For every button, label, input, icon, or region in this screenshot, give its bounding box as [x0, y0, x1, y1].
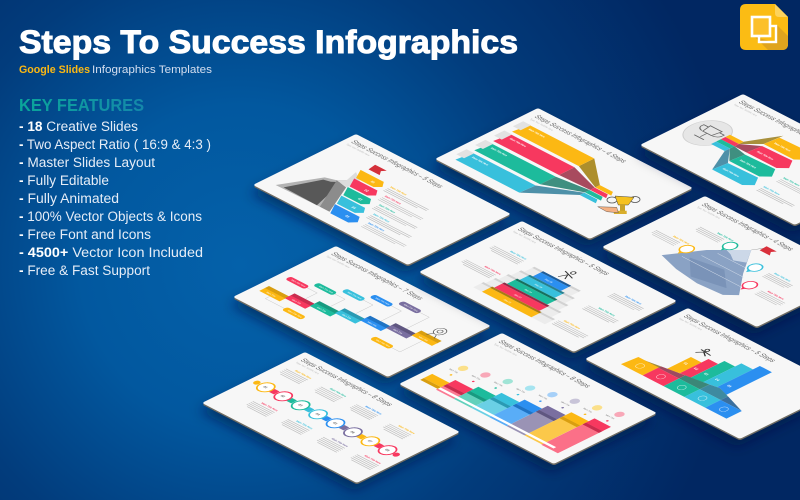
step texts: Main Title Here	[330, 438, 350, 448]
flag	[751, 244, 777, 257]
icons and labels: Main Title	[448, 368, 459, 374]
slide subtitle: Type Your Subtitle Here	[345, 143, 372, 157]
ring timeline: 06	[349, 430, 356, 434]
step texts	[337, 186, 458, 248]
feature list: - Two Aspect Ratio ( 16:9 & 4:3 )	[19, 137, 211, 152]
ring timeline	[248, 378, 406, 459]
slide: ascending blocks 8 steps	[396, 333, 657, 472]
step texts: Main Title Here	[773, 272, 793, 282]
slide title: Steps Success Infographics – 4 Steps	[532, 114, 629, 164]
icons and labels	[443, 346, 627, 440]
arrow tags	[302, 170, 411, 225]
step blocks: Main Title	[392, 329, 404, 335]
title pills: Main Title Here	[402, 304, 419, 313]
slide title: Steps Success Infographics – 5 Steps	[349, 139, 446, 189]
feature list: - Free & Fast Support	[19, 263, 150, 278]
funnel tags: Main Title Here	[738, 159, 758, 169]
step texts: Main Title Here	[363, 455, 383, 465]
slide title: Steps Success Infographics – 5 Steps	[515, 227, 612, 276]
stepped columns: 02	[692, 367, 699, 371]
step texts: Main Title Here	[295, 420, 315, 430]
slide: stairs 5 steps	[416, 221, 677, 360]
slide subtitle: Type Your Subtitle Here	[325, 255, 352, 269]
funnel bars: Main Title Here	[489, 147, 509, 157]
arrow tags: 02	[363, 189, 370, 193]
title pills: Main Title Here	[346, 291, 363, 300]
arrow tags: 05	[344, 215, 351, 218]
step texts: Main Title Here	[367, 222, 387, 232]
coloured stair bands	[482, 266, 583, 317]
title pills: Main Title Here	[290, 279, 307, 288]
icons and labels: Main Title	[604, 414, 616, 420]
slide title: Steps Success Infographics – 5 Steps	[681, 314, 778, 363]
slide: ring timeline 8 steps	[199, 352, 460, 491]
icon: runner	[556, 269, 580, 281]
slide: zig-zag blocks 7 steps	[230, 246, 491, 385]
step texts: Main Title Here	[597, 307, 617, 317]
feature list: - Master Slides Layout	[19, 155, 155, 170]
slide subtitle: Type Your Subtitle Here	[732, 103, 759, 117]
step texts: Main Title Here	[782, 177, 800, 187]
icon: trophy and hand	[598, 196, 640, 214]
coloured stair bands: Step 02	[513, 294, 523, 299]
icon: trophy circle	[673, 115, 743, 151]
step texts: Main Title Here	[397, 425, 417, 435]
step texts: Main Title Here	[483, 265, 503, 276]
connectors	[265, 266, 449, 360]
light columns	[425, 362, 604, 453]
funnel bars: Main Title Here	[471, 156, 491, 166]
step blocks	[259, 269, 442, 363]
step texts: Main Title Here	[762, 186, 782, 196]
coloured stair bands: Step 04	[533, 284, 544, 289]
title pills: Main Title Here	[318, 285, 335, 294]
slide subtitle: Type Your Subtitle Here	[677, 317, 704, 331]
stepped columns	[621, 330, 796, 419]
step texts	[447, 236, 649, 339]
icon: runner	[695, 347, 716, 358]
step texts: Main Title Here	[294, 369, 314, 380]
heading: key features: KEY FEATURES	[19, 95, 144, 115]
gray stair sides	[473, 262, 596, 324]
slide title: Steps Success Infographics – 8 Steps	[496, 339, 593, 389]
mountain	[652, 230, 790, 300]
title pills: Main Title Here	[374, 339, 391, 348]
icon: google slides logo	[740, 4, 788, 50]
subtitle: Infographics Templates	[92, 64, 213, 76]
step texts: Main Title Here	[766, 290, 786, 300]
stepped columns: 04	[714, 378, 721, 382]
step texts: Main Title Here	[372, 213, 392, 223]
ring timeline: 08	[383, 448, 391, 452]
slide: funnel 4 steps	[432, 108, 693, 247]
feature list: - 18 Creative Slides	[19, 119, 138, 134]
step blocks: Main Title	[417, 336, 429, 342]
mountain	[276, 158, 382, 212]
slide: summit pins 4 steps	[599, 196, 800, 335]
icons and labels: Main Title	[470, 375, 482, 381]
ring timeline: 03	[297, 403, 304, 407]
funnel tags	[687, 122, 800, 188]
coloured stair bands: Step 01	[502, 299, 513, 304]
step blocks: Main Title	[265, 292, 277, 298]
step blocks: Main Title	[366, 321, 378, 327]
slide subtitle: Type Your Subtitle Here	[511, 230, 538, 244]
slide: trophy funnel tags	[637, 94, 800, 233]
step texts: Main Title Here	[562, 320, 582, 330]
slide title: Steps Success Infographics – 8 Steps	[298, 358, 395, 407]
slide subtitle: Type Your Subtitle Here	[492, 343, 519, 357]
step texts: Main Title Here	[364, 405, 384, 415]
icons and labels: Main Title	[492, 381, 504, 387]
step texts: Main Title Here	[260, 402, 280, 412]
subtitle: Google Slides	[19, 64, 90, 76]
ring timeline: 02	[279, 394, 286, 398]
step blocks: Main Title	[315, 307, 327, 313]
stepped columns: 01	[682, 362, 689, 365]
funnel bars: Main Title Here	[508, 137, 528, 148]
stepped columns: 05	[726, 384, 733, 388]
feature list: - Fully Editable	[19, 173, 109, 188]
title pills: Main Title Here	[374, 297, 391, 306]
feature list	[19, 119, 211, 278]
step texts: Main Title Here	[389, 186, 409, 196]
ring timeline: 04	[314, 412, 321, 416]
arrow tags: 03	[356, 197, 363, 201]
step blocks: Main Title	[340, 314, 353, 320]
coloured stair bands: Step 05	[543, 278, 554, 284]
icons and labels: Main Title	[582, 408, 594, 414]
step blocks	[420, 355, 611, 452]
stepped columns: 03	[702, 372, 710, 376]
location pins	[669, 231, 789, 292]
ring timeline: 01	[262, 385, 269, 389]
title pills: Main Title Here	[286, 310, 303, 319]
step texts: Main Title Here	[377, 204, 397, 214]
step texts	[757, 176, 800, 208]
funnel bars: Main Title Here	[527, 128, 547, 138]
feature list: - Free Font and Icons	[19, 227, 151, 242]
funnel tags: Main Title Here	[773, 142, 793, 152]
ring timeline: 05	[331, 421, 339, 425]
step blocks: Main Title	[290, 299, 302, 305]
step texts	[643, 215, 800, 306]
slide subtitle: Type Your Subtitle Here	[294, 361, 321, 375]
title pills	[253, 260, 444, 357]
slide subtitle: Type Your Subtitle Here	[528, 118, 555, 132]
slide: stepped columns 5 steps	[582, 308, 800, 447]
step texts: Main Title Here	[716, 232, 736, 242]
step texts: Main Title Here	[509, 250, 529, 260]
funnel tags: Main Title Here	[756, 150, 776, 161]
icon: gear	[426, 327, 450, 339]
slide title: Steps Success Infographics – 7 Steps	[329, 251, 426, 301]
icons and labels: Main Title	[537, 394, 549, 400]
ring timeline: 07	[366, 439, 373, 443]
feature list: - Fully Animated	[19, 191, 119, 206]
slide subtitle: Type Your Subtitle Here	[695, 206, 722, 220]
step texts: Main Title Here	[328, 387, 348, 398]
step texts: Main Title Here	[624, 295, 644, 305]
slide: mountain 5 steps	[250, 134, 511, 273]
flag	[367, 165, 388, 175]
icons and labels: Main Title	[515, 388, 527, 394]
title: Steps To Success Infographics	[19, 24, 518, 60]
funnel tags: Main Title Here	[721, 167, 741, 178]
coloured stair bands: Step 03	[523, 289, 533, 294]
icons and labels: Main Title	[560, 401, 571, 407]
step texts: Main Title Here	[672, 235, 692, 245]
arrow tags: 01	[369, 180, 376, 184]
step texts	[229, 366, 433, 470]
feature list: - 4500+ Vector Icon Included	[19, 245, 203, 260]
feature list: - 100% Vector Objects & Icons	[19, 209, 202, 224]
arrow tags: 04	[350, 206, 357, 210]
funnel bars	[451, 121, 640, 217]
step texts: Main Title Here	[383, 195, 403, 205]
